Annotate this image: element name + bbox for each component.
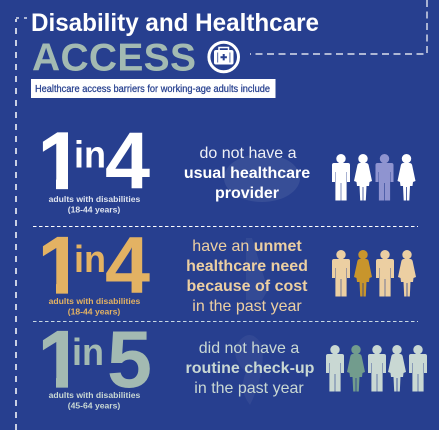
- description text: [184, 145, 310, 202]
- heading: ACCESS: ACCESS: [32, 36, 196, 80]
- description text: have an unmet: [192, 238, 302, 255]
- description text: because of cost: [187, 278, 308, 295]
- caption: age group: (45-64 years): [68, 400, 120, 410]
- description text: did not have a: [199, 340, 299, 357]
- caption: age group: adults with disabilities: [49, 194, 141, 204]
- statistic: 1 in 5: 1: [38, 315, 83, 405]
- description text: usual healthcare: [184, 165, 310, 182]
- caption: age group: (18-44 years): [68, 306, 120, 316]
- pictogram: 1 of 4 people highlighted: [332, 154, 416, 200]
- statistic: 1 in 4: 4: [105, 221, 150, 311]
- description text: healthcare need: [186, 258, 308, 275]
- caption: age group: [49, 296, 141, 316]
- panel: unmet healthcare need because of cost: [42, 236, 416, 316]
- pictogram: 1 of 4 people highlighted: [332, 250, 416, 296]
- statistic: 1 in 4: 1: [38, 116, 83, 206]
- statistic: 1 in 4: [42, 236, 150, 294]
- statistic: 1 in 4: 4: [105, 116, 150, 206]
- statistic: 1 in 4: [42, 132, 150, 190]
- caption: age group: adults with disabilities: [49, 296, 141, 306]
- statistic: 1 in 5: in: [72, 332, 104, 374]
- statistic: 1 in 4: 1: [38, 221, 83, 311]
- statistic: 1 in 5: 5: [107, 315, 152, 405]
- pictogram: 1 of 5 people highlighted: [326, 345, 427, 392]
- description text: [186, 238, 308, 315]
- statistic: 1 in 4: in: [74, 134, 106, 176]
- caption: age group: [49, 390, 141, 410]
- description text: routine check-up: [186, 360, 315, 377]
- subtitle banner: [31, 79, 276, 98]
- description text: do not have a: [200, 145, 297, 162]
- statistic: 1 in 5: [42, 330, 150, 388]
- description text: in the past year: [192, 298, 302, 315]
- caption: age group: [49, 194, 141, 214]
- description text: in the past year: [194, 380, 304, 397]
- caption: age group: (18-44 years): [68, 204, 120, 214]
- heading: Disability and Healthcare: Disability and Healthcare: [31, 9, 319, 37]
- title: [31, 9, 319, 80]
- panel: no usual healthcare provider: [42, 132, 416, 214]
- icon: medical bag: [209, 42, 238, 72]
- description text: provider: [215, 185, 279, 202]
- statistic: 1 in 4: in: [74, 239, 106, 281]
- panel: no routine check-up: [42, 330, 427, 410]
- description text: [186, 340, 315, 397]
- subtitle banner: Healthcare access barriers for working-age adults include: [35, 84, 270, 95]
- caption: age group: adults with disabilities: [49, 390, 141, 400]
